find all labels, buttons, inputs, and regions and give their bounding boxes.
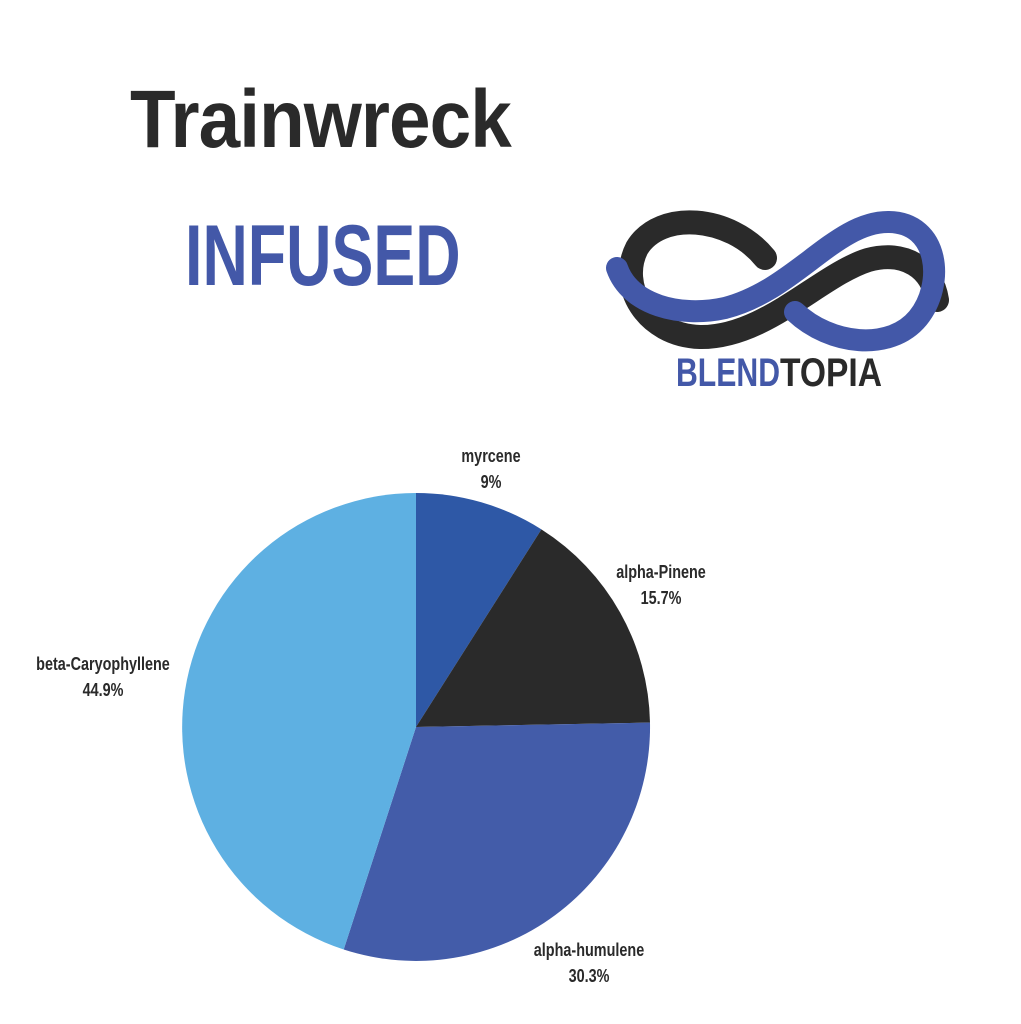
label: alpha-humulene: alpha-humulene	[534, 940, 644, 960]
label: beta-Caryophyllene	[36, 654, 170, 700]
label: beta-Caryophyllene: 44.9%	[83, 680, 123, 700]
title: Trainwreck	[130, 74, 511, 165]
label: beta-Caryophyllene: beta-Caryophyllene	[36, 654, 170, 674]
label: myrcene: 9%	[481, 472, 501, 492]
label: myrcene: myrcene	[461, 446, 521, 466]
pie chart	[182, 493, 650, 961]
label: alpha-Pinene	[616, 562, 706, 608]
label: alpha-Pinene: 15.7%	[641, 588, 681, 608]
label: alpha-humulene: 30.3%	[569, 966, 609, 986]
subtitle: INFUSED	[185, 208, 461, 304]
label: myrcene	[461, 446, 521, 492]
label: alpha-humulene	[534, 940, 644, 986]
logo text: TOPIA	[780, 351, 882, 395]
label: alpha-Pinene: alpha-Pinene	[616, 562, 706, 582]
logo text	[676, 351, 882, 395]
logo text: BLEND	[676, 351, 780, 395]
